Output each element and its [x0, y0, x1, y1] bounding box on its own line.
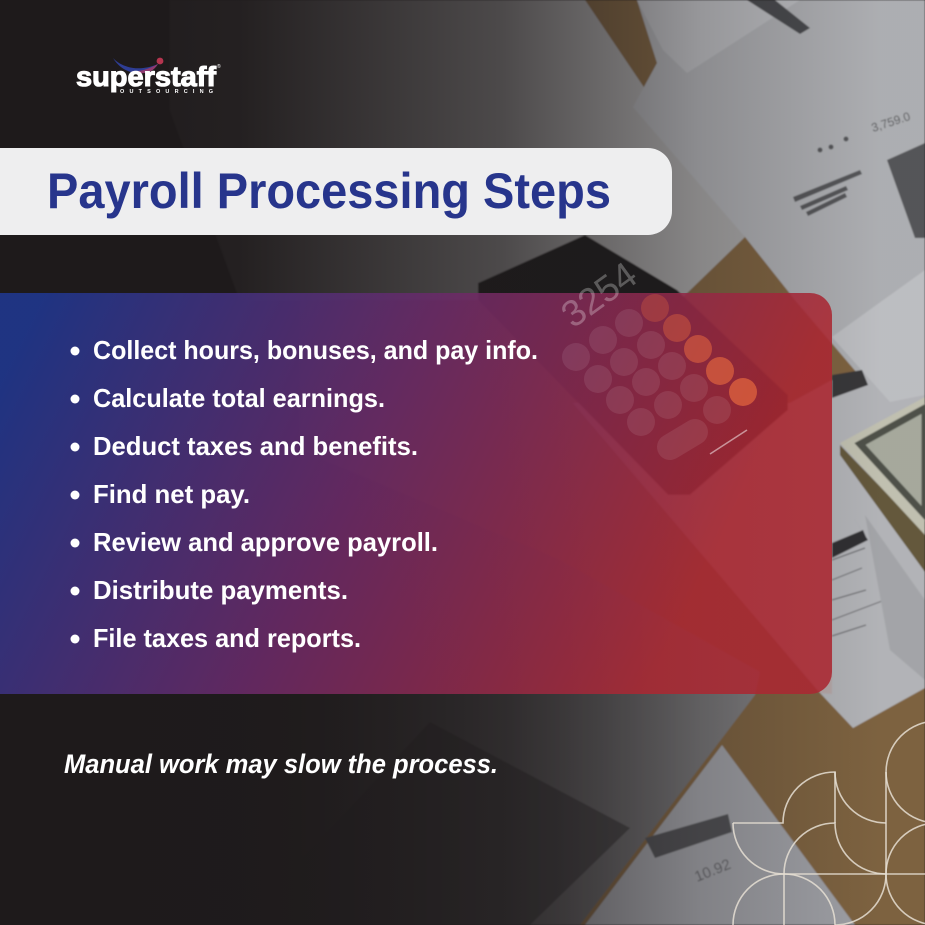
calculator display number: 3254	[554, 254, 644, 335]
dark header on list page	[832, 517, 868, 558]
step 2: Calculate total earnings.	[93, 383, 385, 413]
dark strip on card	[747, 0, 810, 34]
logo registered mark: ®	[217, 63, 221, 70]
wooden desk	[300, 0, 925, 925]
step 7: File taxes and reports.	[93, 623, 361, 653]
laptop trackpad	[240, 722, 630, 925]
bottom document dark label	[645, 814, 732, 858]
paper under phone	[573, 380, 832, 694]
bottom document figure: 10.92	[692, 856, 733, 886]
step 1: Collect hours, bonuses, and pay info.	[93, 335, 538, 365]
banknote	[860, 408, 925, 515]
phone	[478, 235, 788, 495]
logo swoosh	[113, 58, 158, 73]
paper sheet: top centre	[170, 0, 745, 300]
step 6: Distribute payments.	[93, 575, 348, 605]
laptop	[0, 400, 760, 925]
paper card: top right	[637, 0, 800, 73]
cash stack top	[840, 397, 925, 535]
paper report: upper right	[633, 0, 925, 400]
step 4: Find net pay.	[93, 479, 250, 509]
panel background	[0, 293, 832, 694]
logo tagline: OUTSOURCING	[120, 89, 213, 95]
bottom document	[585, 745, 855, 925]
step 5: Review and approve payroll.	[93, 527, 438, 557]
title bar background	[0, 148, 672, 235]
logo	[76, 58, 221, 95]
logo wordmark: superstaff	[76, 61, 217, 92]
step 3: Deduct taxes and benefits.	[93, 431, 418, 461]
report bar chart and data	[793, 136, 925, 238]
dark header on lower report	[832, 370, 868, 398]
panel: payroll steps	[0, 254, 832, 694]
list text lines	[832, 548, 890, 636]
lower report page	[820, 360, 925, 728]
cash stack side	[840, 445, 925, 572]
sheet beside cash	[865, 515, 925, 680]
title: Payroll Processing Steps	[47, 163, 611, 219]
report figure: 3,759.0	[870, 109, 912, 135]
calculator operator keys	[641, 294, 757, 406]
closing note: Manual work may slow the process.	[64, 749, 498, 779]
decorative line pattern	[733, 721, 925, 925]
calculator keypad seen through panel	[562, 309, 731, 447]
title bar	[0, 148, 672, 235]
phone home bar	[710, 430, 747, 454]
logo dot	[157, 58, 163, 64]
white paper stack	[832, 270, 925, 402]
